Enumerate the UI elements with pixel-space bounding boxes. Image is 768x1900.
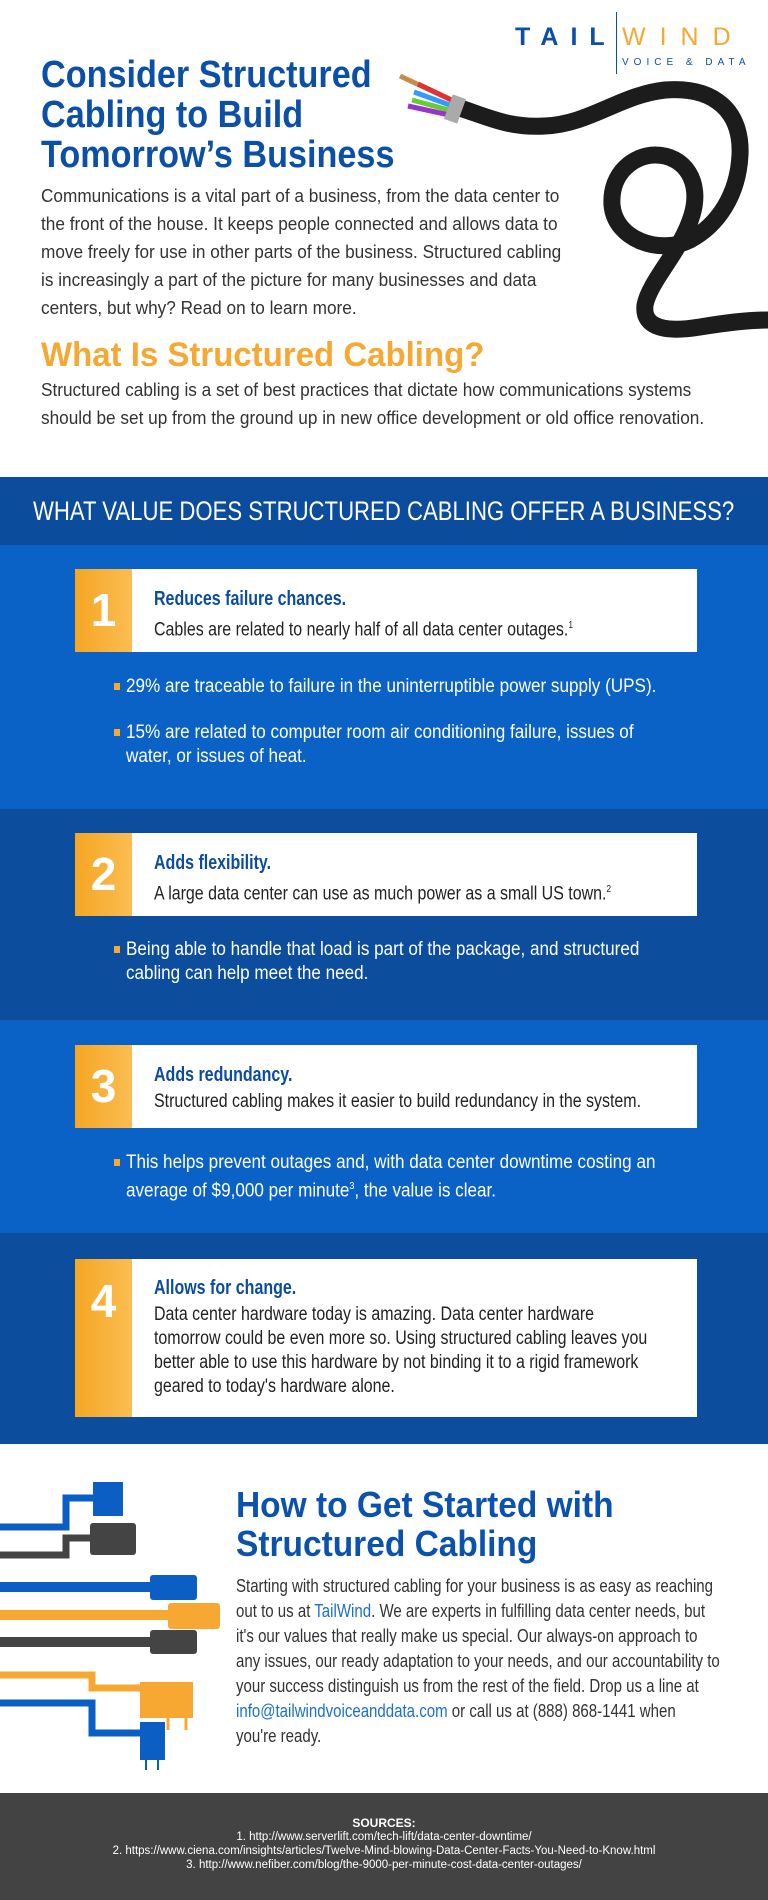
title: Cabling to Build: [41, 94, 303, 136]
intro text: move freely for use in other parts of the business. Structured cabling: [41, 241, 561, 262]
card 3: [75, 1045, 697, 1128]
title: Consider Structured: [41, 54, 372, 96]
card 2: 2: [91, 848, 116, 900]
panel 4: [0, 1233, 768, 1444]
bullet 3: This helps prevent outages and, with data center downtime costing an: [126, 1152, 655, 1173]
card 3: Adds redundancy.: [154, 1064, 292, 1086]
card 4: better able to use this hardware by not binding it to a rigid framework: [154, 1352, 638, 1373]
card 4: tomorrow could be even more so. Using structured cabling leaves you: [154, 1328, 647, 1349]
intro text: centers, but why? Read on to learn more.: [41, 297, 357, 318]
intro text: the front of the house. It keeps people connected and allows data to: [41, 213, 558, 234]
card 4: [75, 1259, 697, 1417]
card 1: Reduces failure chances.: [154, 588, 346, 610]
card 1: 1: [91, 584, 116, 636]
definition text: [41, 379, 704, 428]
closing text: you're ready.: [236, 1726, 321, 1746]
logo: VOICE & DATA: [622, 57, 751, 68]
bullet 2: [114, 939, 639, 984]
heading: how to get started: How to Get Started with: [236, 1484, 614, 1525]
card 2: A large data center can use as much power as a small US town.2: [154, 883, 611, 904]
closing text: info@tailwindvoiceanddata.com or call us at (888) 868-1441 when: [236, 1701, 676, 1721]
closing text: any issues, our ready adaptation to your needs, and our accountability to: [236, 1651, 720, 1671]
card 1: Cables are related to nearly half of all data center outages.1: [154, 619, 573, 640]
card 3: Structured cabling makes it easier to build redundancy in the system.: [154, 1091, 641, 1112]
band heading: WHAT VALUE DOES STRUCTURED CABLING OFFER A BUSINESS?: [33, 496, 734, 526]
intro text: Communications is a vital part of a business, from the data center to: [41, 185, 559, 206]
heading: how to get started: Structured Cabling: [236, 1523, 537, 1564]
title: [41, 54, 394, 176]
bullet 1b: [114, 722, 634, 767]
icon: cable: [399, 74, 768, 338]
footer: sources: SOURCES:: [352, 1816, 416, 1830]
card 4: Data center hardware today is amazing. Data center hardware: [154, 1304, 594, 1325]
card 4: geared to today's hardware alone.: [154, 1376, 395, 1397]
card 2: [75, 833, 697, 916]
bullet 3: average of $9,000 per minute3, the value is clear.: [126, 1180, 496, 1201]
definition text: should be set up from the ground up in new office development or old office renovation.: [41, 407, 704, 428]
card 4: 4: [91, 1275, 116, 1327]
bullet 2: cabling can help meet the need.: [126, 963, 368, 984]
card 2: Adds flexibility.: [154, 852, 271, 874]
closing text: it's our values that really make us special. Our always-on approach to: [236, 1626, 698, 1646]
intro text: is increasingly a part of the picture for many businesses and data: [41, 269, 536, 290]
bullet 2: Being able to handle that load is part of the package, and structured: [126, 939, 639, 960]
logo: TAIL: [515, 23, 617, 51]
title: Tomorrow’s Business: [41, 134, 394, 176]
panel 3: [0, 1020, 768, 1233]
closing text: [236, 1576, 720, 1746]
bullet 1b: water, or issues of heat.: [126, 746, 307, 767]
bullet 3: [114, 1152, 655, 1201]
panel 2: [0, 809, 768, 1020]
card 4: Allows for change.: [154, 1277, 296, 1299]
band heading: [0, 477, 768, 545]
icon: connectors: [0, 1482, 220, 1770]
closing text: your success distinguish us from the rest of the field. Drop us a line at: [236, 1676, 699, 1696]
logo: WIND: [622, 23, 745, 51]
heading: what is structured cabling: What Is Structured Cabling?: [41, 336, 484, 374]
card 3: 3: [91, 1060, 116, 1112]
definition text: Structured cabling is a set of best practices that dictate how communications systems: [41, 379, 691, 400]
bullet 1b: 15% are related to computer room air conditioning failure, issues of: [126, 722, 634, 743]
logo: [515, 12, 751, 74]
heading: how to get started: [236, 1484, 614, 1564]
bullet 1a: 29% are traceable to failure in the uninterruptible power supply (UPS).: [126, 676, 656, 697]
panel 1: [0, 545, 768, 809]
footer: sources: [0, 1793, 768, 1900]
card 1: [75, 569, 697, 652]
footer: sources: 1. http://www.serverlift.com/tech-lift/data-center-downtime/: [236, 1831, 532, 1843]
footer: sources: 2. https://www.ciena.com/insights/articles/Twelve-Mind-blowing-Data-Center-Facts-You-Need-to-Know.html: [113, 1845, 655, 1857]
intro text: [41, 185, 561, 318]
closing text: Starting with structured cabling for your business is as easy as reaching: [236, 1576, 713, 1596]
footer: sources: 3. http://www.nefiber.com/blog/the-9000-per-minute-cost-data-center-outages/: [186, 1859, 582, 1871]
closing text: out to us at TailWind. We are experts in fulfilling data center needs, but: [236, 1601, 705, 1621]
